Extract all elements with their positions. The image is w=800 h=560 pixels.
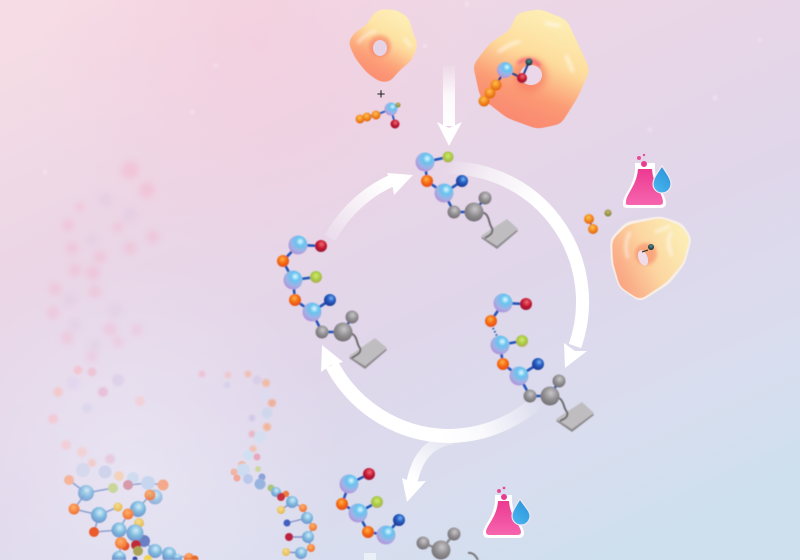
molecule on carrier: top — [416, 152, 518, 249]
cycle arrow: left arc — [330, 173, 413, 238]
icon: flask and water drop, right — [623, 154, 671, 208]
enzyme blob: released — [610, 216, 692, 302]
carrier plate — [550, 396, 594, 432]
exit arrow faint stub — [364, 553, 376, 560]
DNA helix: left strand — [48, 366, 198, 560]
carrier plate — [343, 332, 387, 369]
substrate molecule — [356, 102, 400, 128]
plus sign: + — [377, 86, 386, 103]
molecule released: bottom — [336, 468, 478, 560]
bound substrate — [478, 58, 532, 106]
icon: flask and water drop, bottom — [483, 487, 530, 538]
byproduct atoms — [584, 210, 612, 234]
molecule on carrier: left — [277, 236, 387, 369]
molecule on carrier: right — [485, 294, 594, 432]
enzyme blob: bound — [473, 9, 590, 129]
carrier plate — [474, 212, 518, 249]
DNA helix: right strand — [198, 370, 317, 559]
cycle arrow: bottom arc — [321, 345, 537, 436]
exit arrow — [402, 439, 452, 502]
cycle arrow: right arc — [440, 168, 587, 368]
enzyme blob: free — [348, 9, 418, 82]
entry arrow — [437, 66, 462, 146]
DNA helix: faded upper strand — [47, 161, 159, 362]
